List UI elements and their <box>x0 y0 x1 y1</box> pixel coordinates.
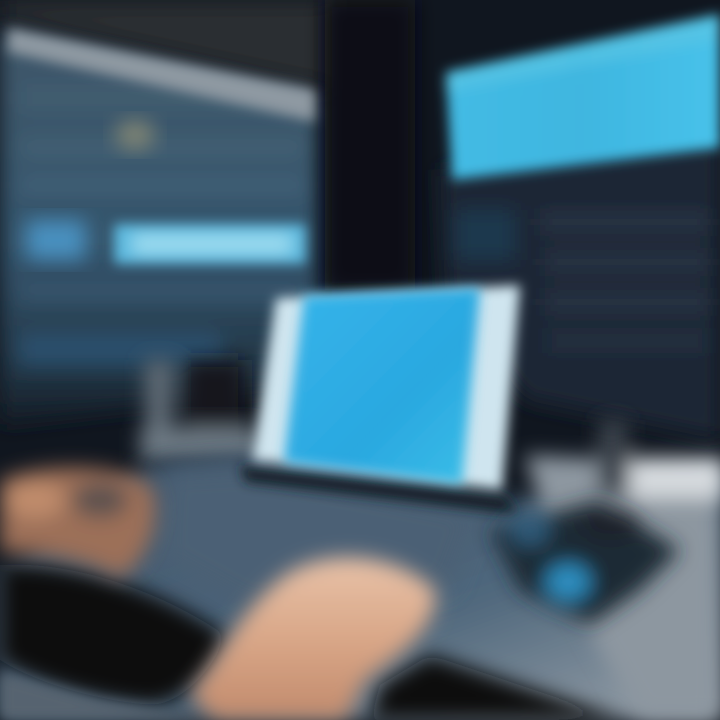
tablet blue screen <box>284 288 480 484</box>
panel: keyboard <box>160 465 480 610</box>
icon: left hand <box>0 467 156 578</box>
bottom dark sleeve right <box>370 655 620 720</box>
panel: tablet device <box>240 285 520 515</box>
panel: central dark column <box>325 0 415 290</box>
icon: amber spot on left monitor <box>115 120 155 150</box>
icon: right hand <box>190 557 435 720</box>
bar: left monitor small blue highlight <box>26 220 86 260</box>
black sleeve left <box>0 564 225 705</box>
heading bar: left monitor top band <box>8 28 318 122</box>
panel: right monitor lower <box>440 140 720 440</box>
panel: left monitor <box>0 30 322 425</box>
panel: bright desk edge right <box>525 420 720 720</box>
tablet white frame <box>252 285 520 490</box>
panel: desk surface <box>0 455 720 720</box>
bar: left monitor bright highlight <box>114 224 306 264</box>
icon: mouse and devices <box>490 500 680 625</box>
panel: desk stand left <box>140 360 260 462</box>
panel: right monitor bright band <box>446 14 720 180</box>
tablet shadow base <box>240 465 520 515</box>
panel: dark wall top-left <box>0 0 330 90</box>
lower-left grey desk <box>0 672 220 720</box>
